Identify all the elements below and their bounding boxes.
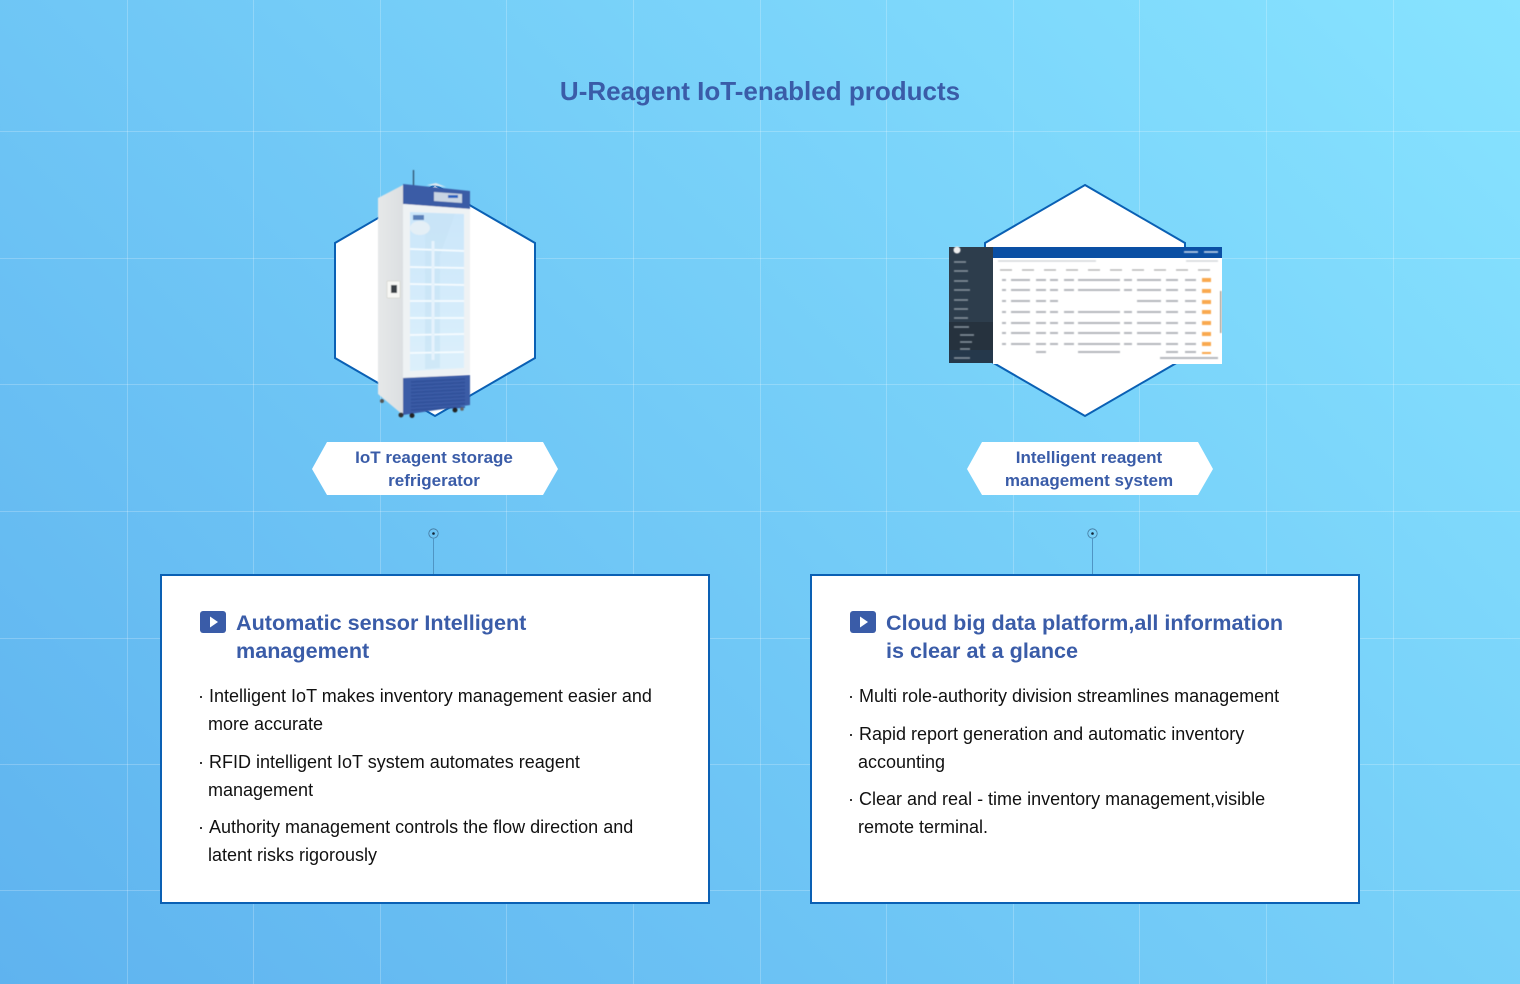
bullet: · [848, 724, 854, 744]
heading: Cloud big data platform,all information [886, 610, 1283, 635]
bullet: · [198, 752, 204, 772]
bullet: RFID intelligent IoT system automates reagent [209, 752, 580, 772]
bullet: · [848, 686, 854, 706]
heading: management [236, 638, 369, 663]
label: management system: management system [1005, 471, 1173, 490]
bullet [848, 724, 1244, 772]
bullet: Authority management controls the flow direction and [209, 817, 633, 837]
label: management system: Intelligent reagent [1016, 448, 1162, 467]
icon: white hexagon [335, 185, 535, 416]
title: U-Reagent IoT-enabled products [560, 76, 960, 106]
heading: is clear at a glance [886, 638, 1078, 663]
bullet: management [208, 780, 313, 800]
panel: cloud platform [810, 574, 1360, 904]
icon: white hexagon [985, 185, 1185, 416]
panel: automatic sensor [160, 574, 710, 904]
panel: refrigerator illustration [334, 170, 536, 419]
heading [236, 610, 526, 663]
label: management system [967, 442, 1213, 495]
bullet: Multi role-authority division streamlines management [859, 686, 1279, 706]
bullet [198, 817, 633, 865]
bullet: more accurate [208, 714, 323, 734]
panel: management system illustration [949, 184, 1222, 417]
bullet [848, 789, 1265, 837]
label: refrigerator [312, 442, 558, 495]
bullet: · [848, 789, 854, 809]
icon: refrigerator [378, 170, 470, 418]
bullet: · [198, 817, 204, 837]
icon: play [200, 611, 226, 633]
bullet: Clear and real - time inventory management,visible [859, 789, 1265, 809]
bullet: · [198, 686, 204, 706]
bullet: latent risks rigorously [208, 845, 377, 865]
bullet: Rapid report generation and automatic inventory [859, 724, 1244, 744]
connector: right [1087, 528, 1098, 574]
heading: Automatic sensor Intelligent [236, 610, 526, 635]
heading [886, 610, 1283, 663]
label: refrigerator: IoT reagent storage [355, 448, 513, 467]
bullet: Intelligent IoT makes inventory management easier and [209, 686, 652, 706]
bullet [198, 752, 580, 800]
icon: software screenshot [949, 246, 1222, 364]
label: refrigerator: refrigerator [388, 471, 480, 490]
bullet: accounting [858, 752, 945, 772]
bullet: remote terminal. [858, 817, 988, 837]
connector: left [428, 528, 439, 574]
icon: play [850, 611, 876, 633]
bullet [198, 686, 652, 734]
